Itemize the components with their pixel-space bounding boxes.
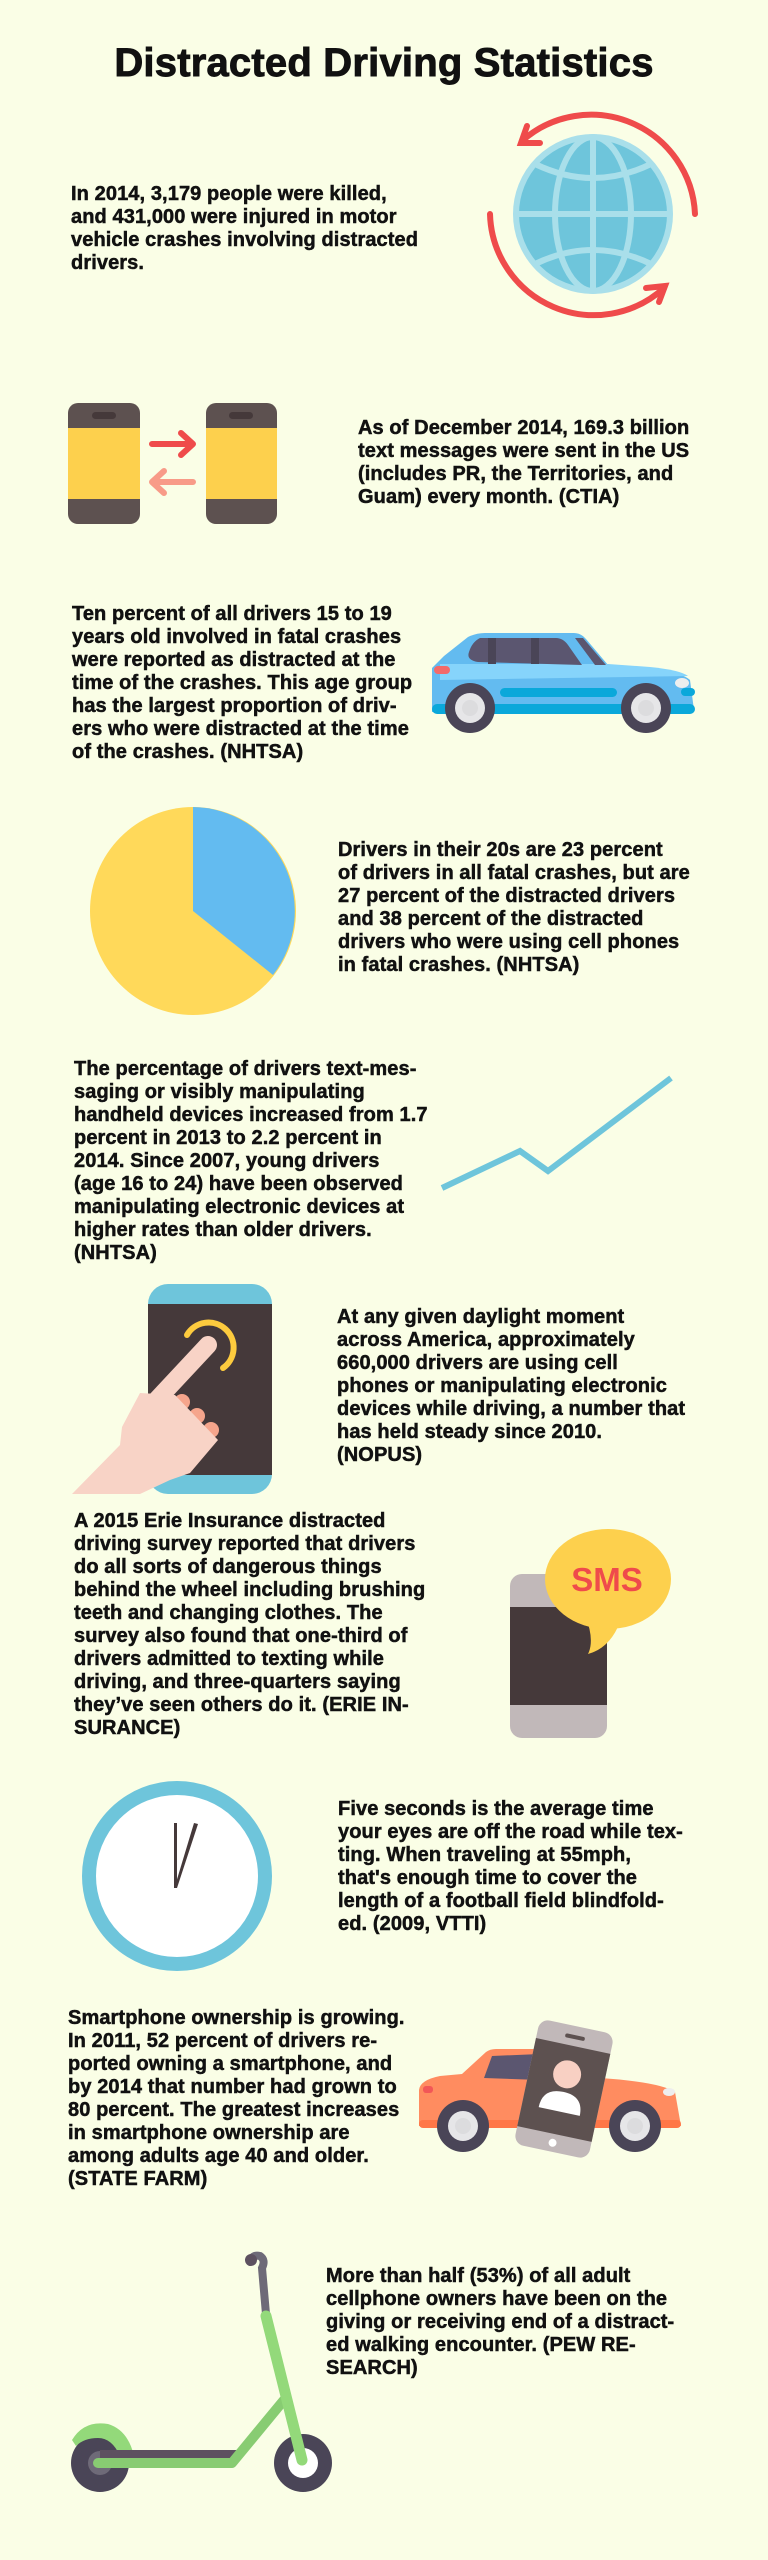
- text: drivers in 20s: [338, 839, 690, 976]
- icon: phone with SMS bubble: [510, 1529, 671, 1738]
- text: five seconds: ting. When traveling at 55mph,: [338, 1844, 631, 1866]
- text: Erie insurance: [74, 1510, 425, 1739]
- text: ten percent teens: has the largest proportion of driv-: [72, 695, 397, 717]
- text: distracted walking: ed walking encounter. (PEW RE-: [326, 2334, 636, 2356]
- text: distracted walking: More than half (53%) of all adult: [326, 2265, 630, 2287]
- text: text-messaging percentage: (age 16 to 24) have been observed: [74, 1173, 403, 1195]
- text: smartphone ownership: Smartphone ownership is growing.: [68, 2007, 405, 2029]
- text: five seconds: Five seconds is the average time: [338, 1798, 654, 1820]
- text: drivers in 20s: in fatal crashes. (NHTSA): [338, 954, 579, 976]
- text: daylight moment: (NOPUS): [337, 1444, 422, 1466]
- text: daylight moment: At any given daylight moment: [337, 1306, 624, 1328]
- text: daylight moment: phones or manipulating electronic: [337, 1375, 667, 1397]
- text: Erie insurance: survey also found that one-third of: [74, 1625, 408, 1647]
- text: smartphone ownership: In 2011, 52 percent of drivers re-: [68, 2030, 377, 2052]
- text: text-messaging percentage: saging or visibly manipulating: [74, 1081, 365, 1103]
- text: five seconds: [338, 1798, 683, 1935]
- text: ten percent teens: of the crashes. (NHTSA): [72, 741, 303, 763]
- line chart: [440, 1076, 673, 1191]
- text: ten percent teens: Ten percent of all drivers 15 to 19: [72, 603, 392, 625]
- text: 2014 deaths: In 2014, 3,179 people were killed,: [71, 183, 387, 205]
- text: ten percent teens: years old involved in fatal crashes: [72, 626, 401, 648]
- text: smartphone ownership: [68, 2007, 405, 2190]
- text: text messages: Guam) every month. (CTIA): [358, 486, 619, 508]
- text: 2014 deaths: vehicle crashes involving distracted: [71, 229, 418, 251]
- icon: clock: [82, 1781, 272, 1971]
- text: ten percent teens: were reported as distracted at the: [72, 649, 396, 671]
- text: ten percent teens: ers who were distracted at the time: [72, 718, 409, 740]
- icon: globe with arrows: [487, 112, 698, 318]
- text: text-messaging percentage: higher rates than older drivers.: [74, 1219, 372, 1241]
- text: text-messaging percentage: percent in 2013 to 2.2 percent in: [74, 1127, 382, 1149]
- text: distracted walking: cellphone owners have been on the: [326, 2288, 667, 2310]
- text: smartphone ownership: in smartphone ownership are: [68, 2122, 350, 2144]
- text: smartphone ownership: by 2014 that number had grown to: [68, 2076, 397, 2098]
- text: text-messaging percentage: handheld devices increased from 1.7: [74, 1104, 428, 1126]
- text: five seconds: your eyes are off the road while tex-: [338, 1821, 683, 1843]
- text: distracted walking: SEARCH): [326, 2357, 418, 2379]
- text: Erie insurance: driving survey reported that drivers: [74, 1533, 415, 1555]
- text: five seconds: that's enough time to cover the: [338, 1867, 637, 1889]
- icon: two phones exchanging texts: [68, 403, 277, 524]
- text: Erie insurance: SURANCE): [74, 1717, 180, 1739]
- text: text-messaging percentage: [74, 1058, 428, 1264]
- text: smartphone ownership: among adults age 40 and older.: [68, 2145, 369, 2167]
- icon: blue car: [432, 633, 695, 733]
- text: Erie insurance: A 2015 Erie Insurance distracted: [74, 1510, 386, 1532]
- text: distracted walking: giving or receiving end of a distract-: [326, 2311, 674, 2333]
- pie chart: [90, 807, 296, 1015]
- text: daylight moment: [337, 1306, 686, 1466]
- text: text messages: (includes PR, the Territories, and: [358, 463, 673, 485]
- icon: hand tapping phone: [72, 1284, 272, 1494]
- text: daylight moment: has held steady since 2010.: [337, 1421, 602, 1443]
- text: distracted walking: [326, 2265, 674, 2379]
- text: 2014 deaths: and 431,000 were injured in motor: [71, 206, 397, 228]
- text: daylight moment: across America, approximately: [337, 1329, 635, 1351]
- text: text-messaging percentage: (NHTSA): [74, 1242, 157, 1264]
- text: 2014 deaths: drivers.: [71, 252, 144, 274]
- title: Distracted Driving Statistics: [114, 41, 654, 85]
- text: Erie insurance: driving, and three-quarters saying: [74, 1671, 401, 1693]
- text: Erie insurance: drivers admitted to texting while: [74, 1648, 384, 1670]
- text: five seconds: length of a football field blindfold-: [338, 1890, 664, 1912]
- text: daylight moment: devices while driving, a number that: [337, 1398, 685, 1420]
- text: drivers in 20s: Drivers in their 20s are 23 percent: [338, 839, 663, 861]
- text: ten percent teens: [72, 603, 412, 763]
- text: daylight moment: 660,000 drivers are using cell: [337, 1352, 618, 1374]
- text: text messages: [358, 417, 689, 508]
- text: text messages: As of December 2014, 169.3 billion: [358, 417, 689, 439]
- text: text-messaging percentage: 2014. Since 2007, young drivers: [74, 1150, 379, 1172]
- text: text-messaging percentage: manipulating electronic devices at: [74, 1196, 404, 1218]
- text: Erie insurance: teeth and changing clothes. The: [74, 1602, 383, 1624]
- text: text messages: text messages were sent in the US: [358, 440, 689, 462]
- text: drivers in 20s: drivers who were using cell phones: [338, 931, 679, 953]
- text: Erie insurance: behind the wheel including brushing: [74, 1579, 425, 1601]
- text: Erie insurance: they’ve seen others do it. (ERIE IN-: [74, 1694, 409, 1716]
- text: text-messaging percentage: The percentage of drivers text-mes-: [74, 1058, 416, 1080]
- text: smartphone ownership: (STATE FARM): [68, 2168, 207, 2190]
- text: five seconds: ed. (2009, VTTI): [338, 1913, 486, 1935]
- icon: phone with SMS bubble: SMS: [571, 1561, 643, 1598]
- text: ten percent teens: time of the crashes. This age group: [72, 672, 412, 694]
- text: Erie insurance: do all sorts of dangerous things: [74, 1556, 382, 1578]
- text: drivers in 20s: 27 percent of the distracted drivers: [338, 885, 675, 907]
- text: drivers in 20s: and 38 percent of the distracted: [338, 908, 644, 930]
- text: drivers in 20s: of drivers in all fatal crashes, but are: [338, 862, 690, 884]
- text: smartphone ownership: ported owning a smartphone, and: [68, 2053, 392, 2075]
- text: smartphone ownership: 80 percent. The greatest increases: [68, 2099, 399, 2121]
- text: 2014 deaths: [70, 183, 418, 274]
